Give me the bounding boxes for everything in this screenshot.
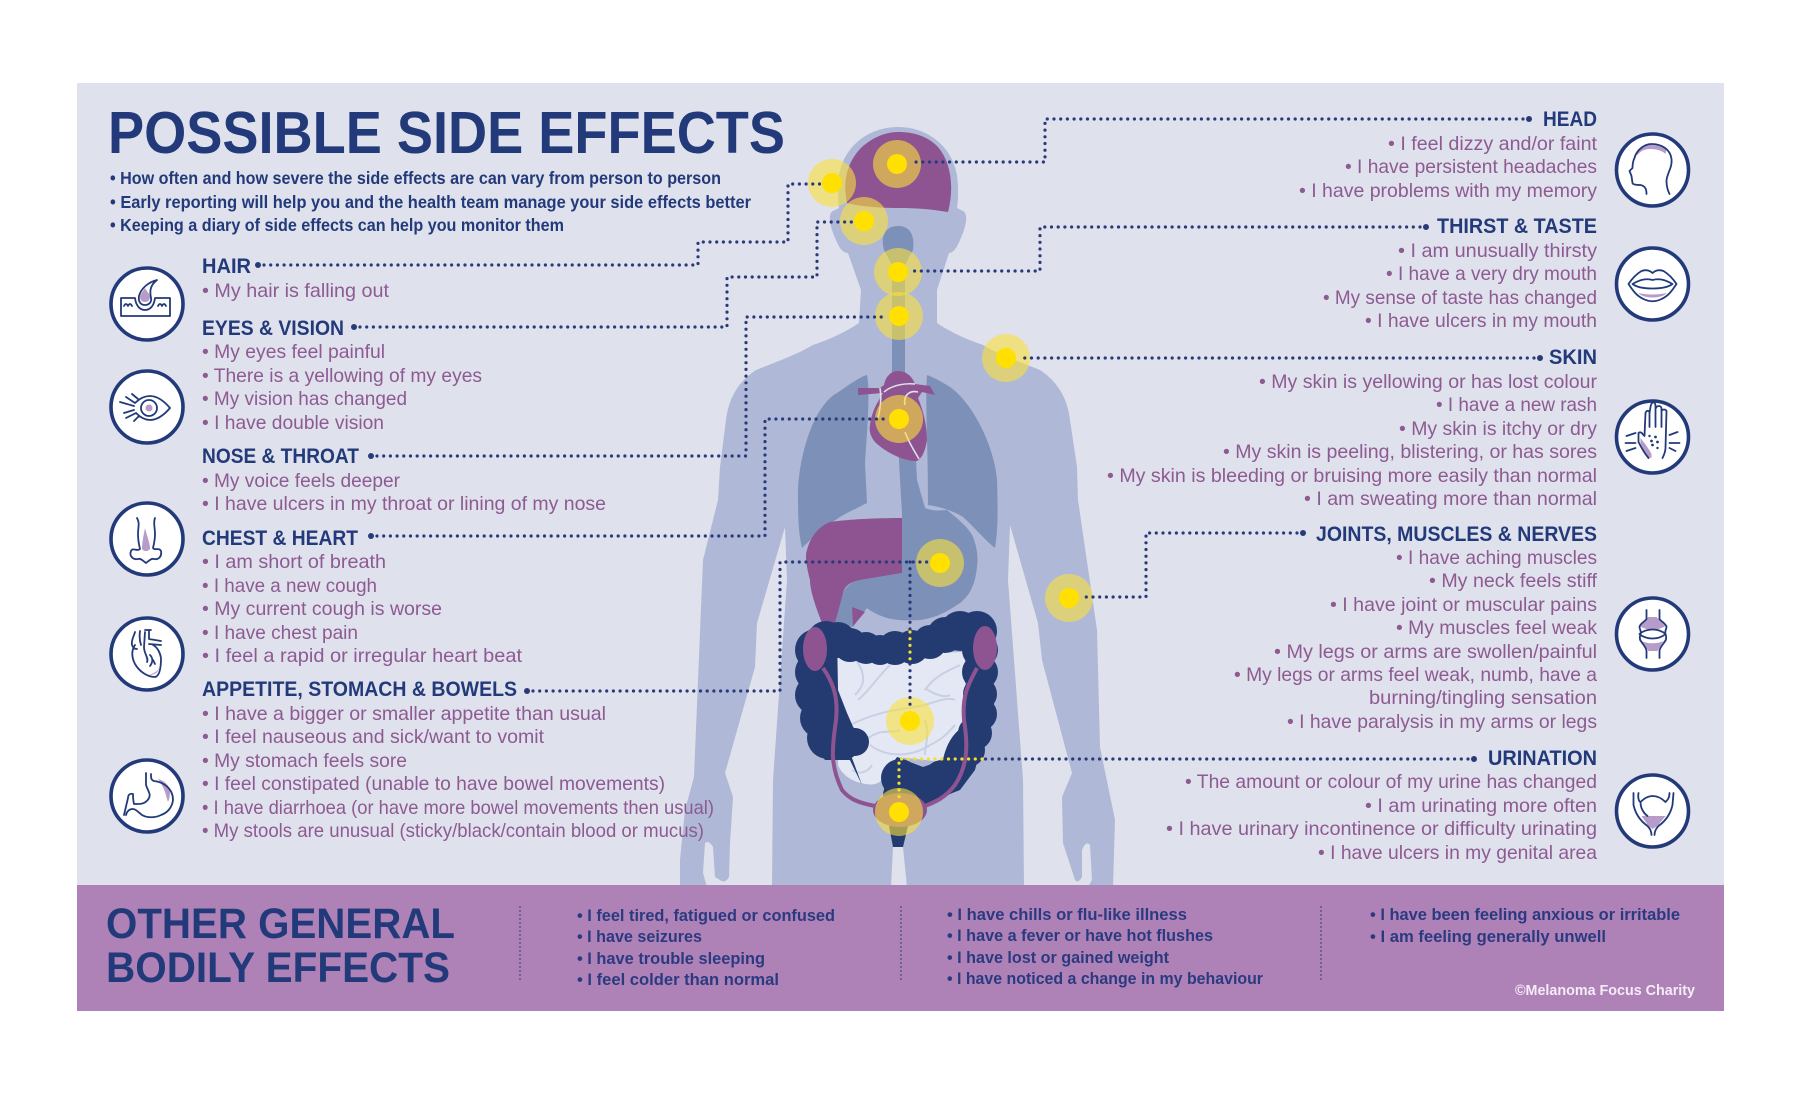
connector lines [255, 116, 1543, 800]
section: eyes and vision [202, 316, 482, 434]
section: nose and throat: • My voice feels deeper [202, 470, 400, 492]
icon: hair follicle [111, 268, 183, 340]
section: joints, muscles and nerves: • I have aching muscles [1396, 547, 1597, 569]
pancreas [852, 607, 865, 626]
section: thirst and taste: THIRST & TASTE [1437, 214, 1597, 238]
intro bullets: • Keeping a diary of side effects can help you monitor them [110, 215, 564, 235]
section: joints, muscles and nerves: • My legs or arms feel weak, numb, have a [1234, 664, 1597, 686]
throat and windpipe [883, 226, 913, 375]
section: eyes and vision: EYES & VISION [202, 316, 344, 340]
section: chest and heart: • I am short of breath [202, 551, 386, 573]
section: thirst and taste: • I am unusually thirsty [1398, 240, 1597, 262]
list column 1: • I have seizures [577, 927, 702, 946]
heading: other general bodily effects [106, 900, 455, 992]
section: head: • I feel dizzy and/or faint [1388, 133, 1598, 155]
panel: other general bodily effects [77, 885, 1724, 1011]
section: eyes and vision: • I have double vision [202, 412, 384, 434]
list column 3 [1370, 905, 1680, 946]
icon: eye [111, 371, 183, 443]
intro bullets [110, 168, 751, 235]
section: joints, muscles and nerves: • I have paralysis in my arms or legs [1287, 711, 1597, 733]
section: chest and heart: CHEST & HEART [202, 526, 358, 550]
icon: head [1616, 134, 1688, 206]
heading: other general bodily effects: OTHER GENERAL [106, 900, 455, 948]
colon [795, 611, 998, 810]
heart [858, 371, 935, 461]
intro bullets: • How often and how severe the side effects are can vary from person to person [110, 168, 721, 188]
section: skin: • I am sweating more than normal [1304, 488, 1597, 510]
section: urination: • The amount or colour of my urine has changed [1185, 771, 1597, 793]
section: head: • I have persistent headaches [1345, 156, 1597, 178]
section: head: HEAD [1543, 107, 1597, 131]
list column 1: • I have trouble sleeping [577, 949, 765, 968]
section: joints, muscles and nerves: • My muscles feel weak [1396, 617, 1597, 639]
kidneys [803, 626, 997, 671]
section: skin: SKIN [1549, 345, 1597, 369]
small intestine [838, 652, 965, 785]
section: urination: • I have ulcers in my genital area [1318, 842, 1597, 864]
section: chest and heart: • I have chest pain [202, 622, 358, 644]
section: skin: • I have a new rash [1436, 394, 1597, 416]
panel: main background [77, 83, 1724, 886]
right column text [1107, 107, 1598, 864]
section: appetite, stomach and bowels: • I feel nauseous and sick/want to vomit [202, 726, 545, 748]
section: chest and heart: • I feel a rapid or irregular heart beat [202, 645, 523, 667]
section: urination: • I am urinating more often [1365, 795, 1597, 817]
section: chest and heart [202, 526, 523, 667]
list column 2 [947, 905, 1263, 988]
heading: other general bodily effects: BODILY EFFECTS [106, 944, 450, 992]
body silhouette [680, 127, 1115, 887]
section: thirst and taste: • I have ulcers in my mouth [1365, 310, 1597, 332]
section: nose and throat [202, 444, 606, 515]
icon: bladder [1616, 775, 1688, 847]
title: POSSIBLE SIDE EFFECTS [108, 100, 785, 166]
section: appetite, stomach and bowels: • I have a bigger or smaller appetite than usual [202, 703, 606, 725]
section: eyes and vision: • My vision has changed [202, 388, 407, 410]
section: urination [1166, 746, 1597, 864]
section: eyes and vision: • My eyes feel painful [202, 341, 385, 363]
list column 1: • I feel tired, fatigued or confused [577, 906, 835, 925]
lungs [798, 375, 998, 548]
icon: nose [111, 503, 183, 575]
section: nose and throat: • I have ulcers in my throat or lining of my nose [202, 493, 606, 515]
section: appetite, stomach and bowels: • I feel constipated (unable to have bowel movements) [202, 773, 665, 795]
hot spot halos [808, 140, 1093, 836]
section: chest and heart: • My current cough is worse [202, 598, 442, 620]
body figure [680, 127, 1115, 887]
section: skin [1107, 345, 1597, 510]
intro bullets: • Early reporting will help you and the health team manage your side effects better [110, 192, 751, 212]
icon: hand with rash [1616, 401, 1688, 473]
list column 3: • I have been feeling anxious or irritable [1370, 905, 1680, 924]
section: chest and heart: • I have a new cough [202, 575, 377, 597]
bladder [873, 793, 927, 847]
section: hair: • My hair is falling out [202, 280, 390, 302]
section: joints, muscles and nerves: burning/tingling sensation [1369, 687, 1597, 709]
section: appetite, stomach and bowels: • I have diarrhoea (or have more bowel movements then usual) [202, 797, 714, 819]
section: urination: URINATION [1488, 746, 1597, 770]
esophagus and stomach [835, 440, 978, 627]
list column 2: • I have chills or flu-like illness [947, 905, 1187, 924]
section: skin: • My skin is itchy or dry [1399, 418, 1597, 440]
section: head: • I have problems with my memory [1299, 180, 1597, 202]
icon: heart [111, 618, 183, 690]
section: appetite, stomach and bowels [202, 677, 714, 842]
section: joints, muscles and nerves: • My legs or arms are swollen/painful [1274, 641, 1597, 663]
list column 1 [577, 906, 835, 989]
hot spot centres [822, 154, 1079, 822]
icon: joint [1616, 598, 1688, 670]
section: thirst and taste: • I have a very dry mouth [1386, 263, 1597, 285]
list column 2: • I have a fever or have hot flushes [947, 926, 1213, 945]
section: skin: • My skin is yellowing or has lost colour [1259, 371, 1597, 393]
list column 2: • I have lost or gained weight [947, 948, 1169, 967]
section: joints, muscles and nerves [1234, 522, 1598, 733]
section: appetite, stomach and bowels: • My stools are unusual (sticky/black/contain blood or mucus) [202, 820, 704, 842]
icon: lips [1616, 248, 1688, 320]
left column text [202, 254, 714, 842]
section: appetite, stomach and bowels: APPETITE, STOMACH & BOWELS [202, 677, 517, 701]
section: eyes and vision: • There is a yellowing of my eyes [202, 365, 482, 387]
copyright: ©Melanoma Focus Charity [1515, 983, 1695, 999]
icon: stomach [111, 760, 183, 832]
section: joints, muscles and nerves: • I have joint or muscular pains [1330, 594, 1597, 616]
section: urination: • I have urinary incontinence or difficulty urinating [1166, 818, 1597, 840]
section: skin: • My skin is bleeding or bruising more easily than normal [1107, 465, 1597, 487]
ureters [823, 668, 977, 806]
section: skin: • My skin is peeling, blistering, or has sores [1223, 441, 1597, 463]
section: appetite, stomach and bowels: • My stomach feels sore [202, 750, 407, 772]
section: thirst and taste [1323, 214, 1597, 332]
list column 1: • I feel colder than normal [577, 970, 779, 989]
brain [845, 132, 951, 212]
section: nose and throat: NOSE & THROAT [202, 444, 359, 468]
list column 2: • I have noticed a change in my behaviour [947, 969, 1263, 988]
section: hair: HAIR [202, 254, 251, 278]
list column 3: • I am feeling generally unwell [1370, 927, 1606, 946]
liver [806, 518, 902, 623]
section: joints, muscles and nerves: • My neck feels stiff [1429, 570, 1598, 592]
section: hair [202, 254, 390, 302]
section: joints, muscles and nerves: JOINTS, MUSCLES & NERVES [1316, 522, 1597, 546]
section: head [1299, 107, 1598, 202]
section: thirst and taste: • My sense of taste has changed [1323, 287, 1597, 309]
